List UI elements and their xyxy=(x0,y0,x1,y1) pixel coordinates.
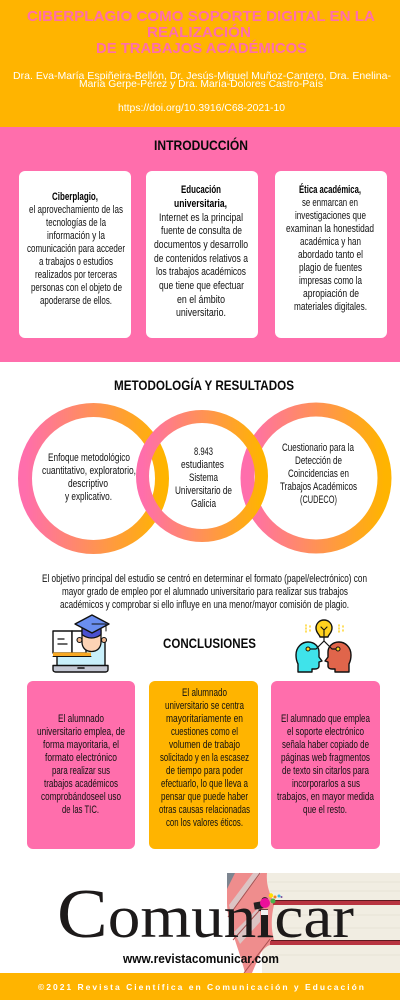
card: causas y valores éticos: efectuarlo, lo que lleva a xyxy=(161,778,248,790)
card: ciberplagio: a trabajos o estudios xyxy=(39,256,113,268)
authors xyxy=(13,70,392,90)
ring: cuestionario cudeco: Detección de xyxy=(295,455,342,467)
card: formato electrónico: trabajos académicos xyxy=(44,778,118,790)
logo: comunicar: Comunicar xyxy=(57,876,354,953)
ring: cuestionario cudeco: Trabajos Académicos xyxy=(280,481,357,493)
authors: Dra. Eva-María Espiñeira-Bellón, Dr. Jesús-Miguel Muñoz-Cantero, Dra. Enelina- xyxy=(13,70,392,82)
ring: cuestionario cudeco xyxy=(248,410,384,546)
card: educación universitaria: los trabajos académicos xyxy=(156,266,246,278)
ring: estudiantes xyxy=(142,416,262,536)
ring: estudiantes: Universitario de xyxy=(175,485,232,497)
card: ciberplagio: realizados por terceras xyxy=(35,269,117,281)
ring: cuestionario cudeco: Cuestionario para la xyxy=(282,442,354,454)
panel: footer xyxy=(0,973,400,1000)
ring: enfoque metodológico: y explicativo. xyxy=(65,491,112,503)
card: soporte electrónico y copia: trabajos, en mayor medida xyxy=(277,791,374,803)
card: formato electrónico: El alumnado xyxy=(58,713,104,725)
card: educación universitaria: en el ámbito xyxy=(177,294,225,306)
card: formato electrónico: comprobándoseel uso xyxy=(41,791,121,803)
icon: laptop with graduate xyxy=(53,615,109,672)
card: ética académica: plagio de fuentes xyxy=(299,262,362,274)
card: ética académica xyxy=(275,171,387,338)
card: educación universitaria: de contenidos relativos a xyxy=(154,253,248,265)
panel: introducción xyxy=(0,127,400,362)
card: soporte electrónico y copia: El alumnado que emplea xyxy=(281,713,370,725)
card: ética académica: Ética académica, xyxy=(299,183,361,196)
image: stack of books xyxy=(227,873,400,973)
doi link: https://doi.org/10.3916/C68-2021-10 xyxy=(118,102,285,114)
card: formato electrónico: de las TIC. xyxy=(62,804,99,816)
card: ciberplagio: Ciberplagio, xyxy=(52,191,98,203)
card: causas y valores éticos: otras causas relacionadas xyxy=(159,804,250,816)
card: educación universitaria: fuente de consulta de xyxy=(161,225,242,237)
card: causas y valores éticos: volumen de trabajo xyxy=(169,739,240,751)
diagram: three overlapping rings xyxy=(25,410,384,547)
icon: two heads with light bulb xyxy=(296,620,351,672)
card: formato electrónico: universitario emplea, de xyxy=(37,726,125,738)
card: educación universitaria: que tiene que efectuar xyxy=(159,280,244,292)
heading: introducción: INTRODUCCIÓN xyxy=(154,136,248,153)
card: ética académica: impresas como la xyxy=(299,275,362,287)
card: causas y valores éticos: de tiempo para poder xyxy=(166,765,243,777)
card: ética académica: materiales digitales. xyxy=(294,301,367,313)
card: causas y valores éticos: solicitado y en la escasez xyxy=(160,752,249,764)
panel: header xyxy=(0,0,400,127)
card: ética académica: apropiación de xyxy=(303,288,359,300)
card: formato electrónico: forma mayoritaria, el xyxy=(43,739,119,751)
ring: cuestionario cudeco: (CUDECO) xyxy=(300,494,337,506)
ring: estudiantes: Sistema xyxy=(189,472,218,484)
card: causas y valores éticos: con los valores éticos. xyxy=(166,817,243,829)
card: causas y valores éticos: cuestiones como el xyxy=(171,726,238,738)
card: ciberplagio: personas con el objeto de xyxy=(31,282,122,294)
card: formato electrónico: formato electrónico xyxy=(45,752,117,764)
card: ética académica: se enmarcan en xyxy=(302,197,358,209)
ring: estudiantes: 8.943 xyxy=(194,446,213,458)
card: ciberplagio: tecnologías de la xyxy=(46,217,106,229)
card: educación universitaria xyxy=(146,171,258,338)
card: soporte electrónico y copia: que el resto. xyxy=(303,804,347,816)
title xyxy=(27,8,375,57)
authors: María Gerpe-Pérez y Dra. María-Dolores Castro-País xyxy=(79,78,323,90)
card: soporte electrónico y copia: páginas web fragmentos xyxy=(281,752,370,764)
card: soporte electrónico y copia: el soporte electrónico xyxy=(287,726,364,738)
card: ciberplagio xyxy=(19,171,131,338)
card: soporte electrónico y copia: de texto sin citarlos para xyxy=(282,765,369,777)
card: causas y valores éticos: mayoritariamente en xyxy=(166,713,243,725)
ring: enfoque metodológico: Enfoque metodológico xyxy=(48,452,130,464)
card: educación universitaria: Educación xyxy=(181,184,221,196)
card: soporte electrónico y copia xyxy=(271,681,380,849)
card: causas y valores éticos: universitario se centra xyxy=(165,700,244,712)
title: REALIZACIÓN xyxy=(147,23,251,41)
card: causas y valores éticos: pensar que puede haber xyxy=(161,791,248,803)
ring: enfoque metodológico xyxy=(25,410,162,547)
card: formato electrónico: para realizar sus xyxy=(52,765,110,777)
card: ciberplagio: comunicación para acceder xyxy=(27,243,125,255)
ring: estudiantes: estudiantes xyxy=(181,459,224,471)
footer credit: ©2021 Revista Científica en Comunicación y Educación xyxy=(38,982,364,992)
card: educación universitaria: Internet es la principal xyxy=(159,212,243,224)
card: ética académica: abordado tanto el xyxy=(298,249,363,261)
card: educación universitaria: documentos y desarrollo xyxy=(154,239,248,251)
card: causas y valores éticos: El alumnado xyxy=(182,687,227,699)
title: CIBERPLAGIO COMO SOPORTE DIGITAL EN LA xyxy=(27,8,375,25)
ring: enfoque metodológico: descriptivo xyxy=(68,478,108,490)
card: soporte electrónico y copia: incorporarlos a sus xyxy=(292,778,360,790)
card: ciberplagio: el aprovechamiento de las xyxy=(29,204,123,216)
card: ética académica: investigaciones que xyxy=(295,210,366,222)
text block: objetivo del estudio xyxy=(42,573,367,611)
ring: cuestionario cudeco: Coincidencias en xyxy=(288,468,349,480)
card: educación universitaria: universitaria, xyxy=(174,198,227,210)
heading: conclusiones: CONCLUSIONES xyxy=(163,635,256,651)
card: ciberplagio: información y la xyxy=(47,230,105,242)
card: ética académica: académica y han xyxy=(300,236,361,248)
website url: www.revistacomunicar.com xyxy=(122,952,279,966)
card: ética académica: examinan la honestidad xyxy=(286,223,374,235)
card: soporte electrónico y copia: señala haber copiado de xyxy=(282,739,369,751)
title: DE TRABAJOS ACADÉMICOS xyxy=(96,40,307,57)
card: causas y valores éticos xyxy=(149,681,258,849)
ring: enfoque metodológico: cuantitativo, exploratorio, xyxy=(42,465,136,477)
card: formato electrónico xyxy=(27,681,135,849)
heading: metodología y resultados: METODOLOGÍA Y RESULTADOS xyxy=(114,377,294,393)
card: educación universitaria: universitario. xyxy=(176,307,226,319)
ring: estudiantes: Galicia xyxy=(191,498,216,510)
card: ciberplagio: apoderarse de ellos. xyxy=(40,295,112,307)
